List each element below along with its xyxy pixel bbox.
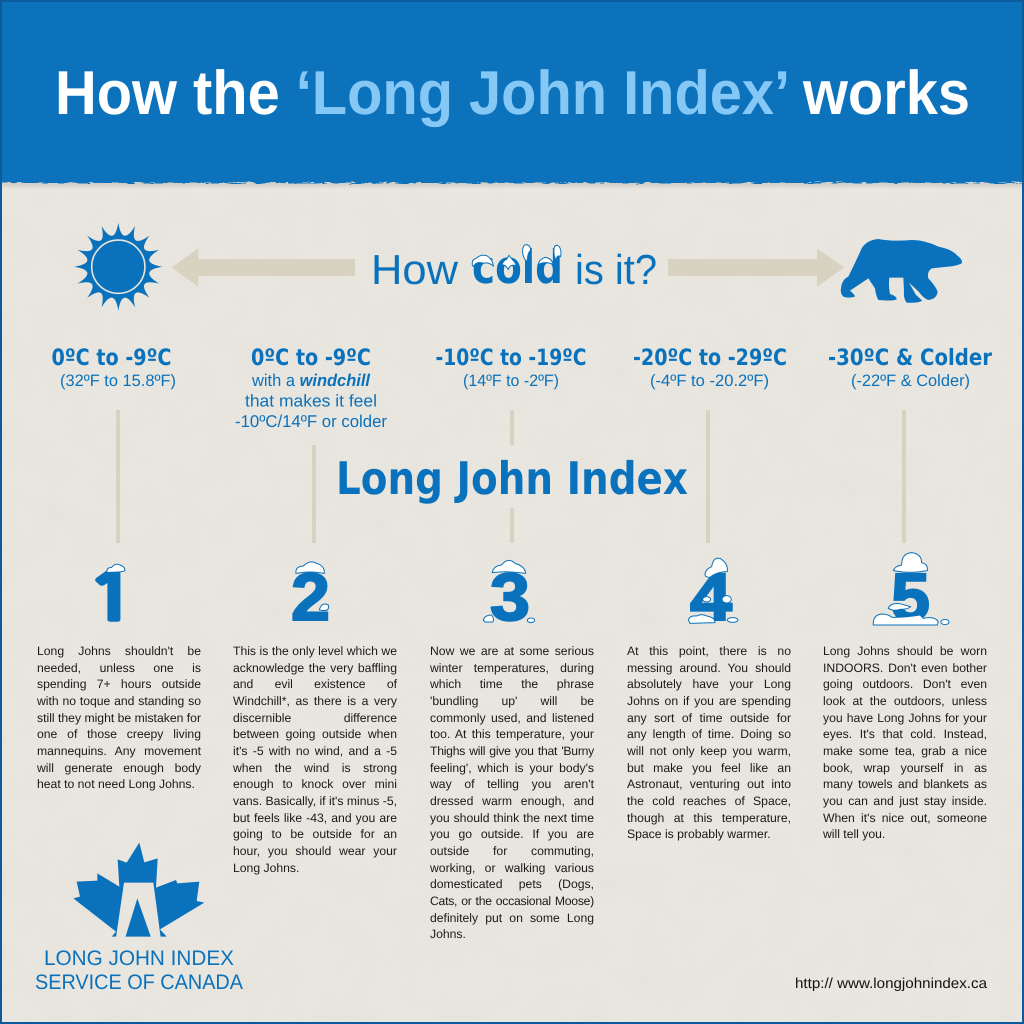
text block: level 5: Long Johns should be worn [823, 644, 987, 658]
text block: level 3: commonly used, and listened [430, 711, 594, 725]
heading: how cold is it: cold [472, 240, 563, 294]
level 1 temperature range: 0ºC to -9ºC [52, 345, 172, 371]
level 2 temperature range: that makes it feel [245, 392, 377, 410]
text block: level 2: Long Johns. [233, 861, 299, 875]
text block: level 2 [233, 644, 397, 875]
text block: level 1: spending 7+ hours outside [37, 677, 201, 691]
text block: level 2: hour, you should wear your [233, 844, 397, 858]
text block: level 3: outside for commuting, [430, 844, 594, 858]
number 1 with snow: 1 [86, 564, 138, 630]
level 2 temperature range: with a windchill [251, 371, 371, 390]
text block: level 2: This is the only level which we [233, 644, 397, 658]
text block: level 4: though at this temperature, [627, 811, 791, 825]
text block: level 4: messing around. You should [627, 661, 791, 675]
level 4 temperature range: (-4ºF to -20.2ºF) [650, 372, 769, 390]
text block: level 2: Windchill*, as there is a very [233, 694, 397, 708]
text block: level 5: make some tea, grab a nice [823, 744, 987, 758]
text block: level 4: Space is probably warmer. [627, 827, 771, 841]
text block: level 5 [823, 644, 987, 841]
text block: level 1: Long Johns shouldn't be [37, 644, 201, 658]
number 3 with snow: 3 [490, 560, 530, 635]
logo: Long John Index Service of Canada: SERVICE OF CANADA [35, 971, 243, 994]
text block: level 3 [430, 644, 594, 941]
text block: level 5: going outdoors. Don't even [823, 677, 987, 691]
text block: level 4: the cold reaches of Space, [627, 794, 791, 808]
text block: level 3: feeling', which is your body's [430, 761, 594, 775]
text block: level 2: discernible difference [233, 711, 397, 725]
text block: level 3: too. At this temperature, your [430, 727, 594, 741]
number 2 with snow: 2 [291, 560, 330, 635]
text block: level 2: going to be outside for an [233, 827, 397, 841]
text block: level 4: absolutely have your Long [627, 677, 791, 691]
text block: level 5: When it's nice out, someone [823, 811, 987, 825]
text block: level 4: but make you feel like an [627, 761, 791, 775]
text block: level 3: you should think the next time [430, 811, 594, 825]
heading: how cold is it: How [371, 246, 459, 293]
text block: level 5: you have Long Johns for your [823, 711, 987, 725]
text block: level 1: one of those creepy living [37, 727, 201, 741]
text block: level 2: it's -5 with no wind, and a -5 [233, 744, 397, 758]
text block: level 3: which time the phrase [430, 677, 594, 691]
text block: level 1: still they might be mistaken for [37, 711, 201, 725]
heading: how cold is it: is it? [575, 246, 657, 293]
text block: level 2: vans. Basically, if it's minus -5, [233, 794, 397, 808]
text block: level 4: will not only keep you warm, [627, 744, 791, 758]
text block: level 4 [627, 644, 791, 841]
text block: level 5: you can and just stay inside. [823, 794, 987, 808]
text block: level 1 [37, 644, 201, 791]
level 2 temperature range: 0ºC to -9ºC [251, 345, 371, 371]
text block: level 2: between going outside when [233, 727, 397, 741]
level 2 temperature range: -10ºC/14ºF or colder [235, 412, 387, 431]
text block: level 3: winter temperatures, during [430, 661, 594, 675]
text block: level 3: Now we are at some serious [430, 644, 594, 658]
text block: level 3: Thighs will give you that 'Burny [430, 744, 594, 758]
text block: level 4: At this point, there is no [627, 644, 791, 658]
text block: level 1: needed, unless one is [37, 661, 201, 675]
text block: level 4: any sort of time outside for [627, 711, 791, 725]
text block: level 5: look at the outdoors, unless [823, 694, 987, 708]
level 5 temperature range: -30ºC & Colder [828, 345, 993, 371]
text block: level 3: dressed warm enough, and [430, 794, 594, 808]
text block: level 3: definitely put on some Long [430, 911, 594, 925]
text block: level 1: with no toque and standing so [37, 694, 201, 708]
text block: level 3: way of telling you aren't [430, 777, 594, 791]
text block: level 2: but feels like -43, and you are [233, 811, 397, 825]
logo: Long John Index Service of Canada: LONG JOHN INDEX [44, 947, 234, 970]
text block: level 2: when the wind is strong [233, 761, 397, 775]
text block: level 2: and evil existence of [233, 677, 397, 691]
level 5 temperature range: (-22ºF & Colder) [851, 372, 970, 390]
text block: level 5: INDOORS. Don't even bother [823, 661, 987, 675]
text block: level 2: acknowledge the very baffling [233, 661, 397, 675]
text block: level 1: mannequins. Any movement [37, 744, 201, 758]
text block: level 5: many towels and blankets as [823, 777, 987, 791]
text block: level 3: domesticated pets (Dogs, [430, 877, 594, 891]
number 4 with snow: 4 [690, 560, 732, 635]
number 5 with snow: 5 [891, 560, 930, 635]
level 4 temperature range: -20ºC to -29ºC [633, 345, 787, 371]
website url: http:// www.longjohnindex.ca [795, 976, 988, 992]
text block: level 3: working, or walking various [430, 861, 594, 875]
text block: level 5: will tell you. [823, 827, 885, 841]
text block: level 3: 'bundling up' will be [430, 694, 594, 708]
text block: level 4: any length of time. Doing so [627, 727, 791, 741]
heading: Long John Index: Long John Index [336, 452, 688, 505]
text block: level 5: eyes. It's that cold. Instead, [823, 727, 987, 741]
level 3 temperature range: -10ºC to -19ºC [436, 345, 586, 371]
text block: level 2: enough to knock over mini [233, 777, 397, 791]
text block: level 3: Johns. [430, 927, 466, 941]
text block: level 1: heat to not need Long Johns. [37, 777, 195, 791]
text block: level 5: book, wrap yourself in as [823, 761, 987, 775]
text block: level 4: Johns on if you are spending [627, 694, 791, 708]
text block: level 1: will generate enough body [37, 761, 201, 775]
level 1 temperature range: (32ºF to 15.8ºF) [60, 372, 176, 390]
text block: level 4: Astronaut, venturing out into [627, 777, 791, 791]
text block: level 3: Cats, or the occasional Moose) [430, 894, 594, 908]
title: How the ‘Long John Index’ works [55, 59, 970, 128]
text block: level 3: you go outside. If you are [430, 827, 594, 841]
level 3 temperature range: (14ºF to -2ºF) [463, 372, 559, 390]
